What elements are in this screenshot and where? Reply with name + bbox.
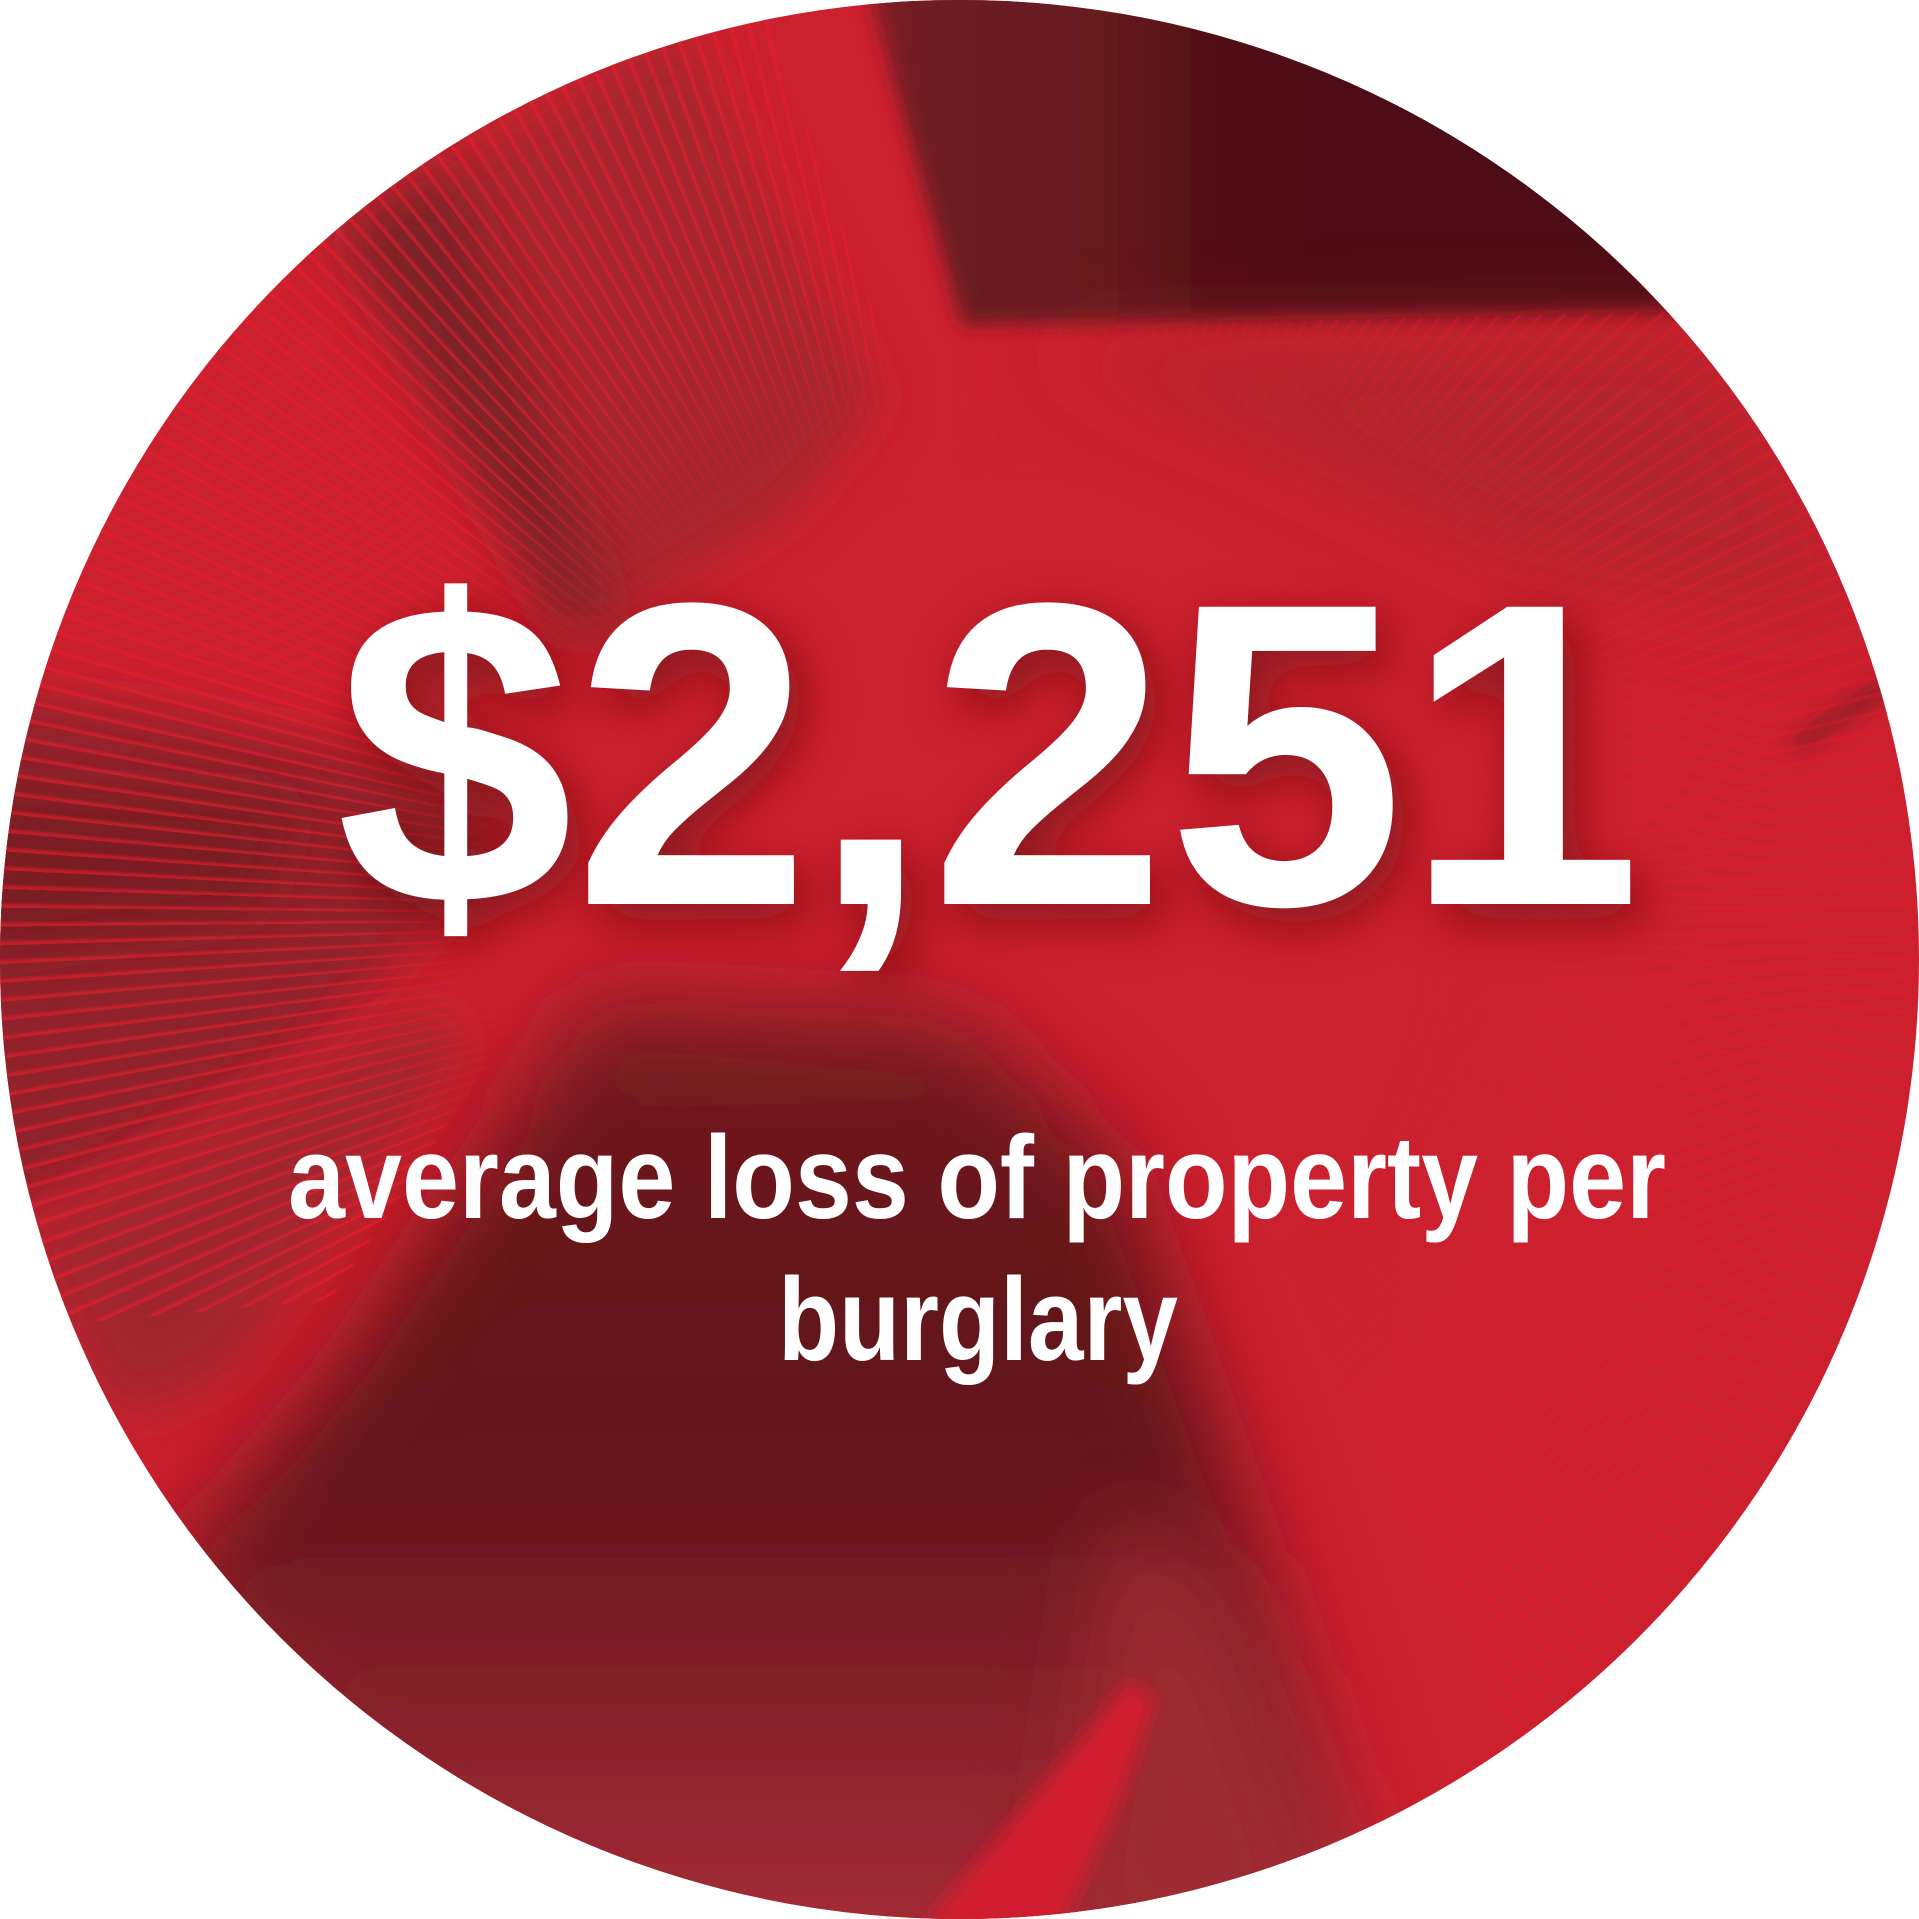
muted band lower left edge [20, 1010, 470, 1420]
muted striped zone top right [1020, 330, 1860, 620]
lighter muted zone bottom right of dark shape [1050, 1500, 1350, 1919]
caption line 2: burglary [778, 1254, 1178, 1386]
bright red streak bottom [920, 1680, 1155, 1919]
dark streak right edge [1790, 680, 1890, 750]
muted striped fan left [0, 690, 520, 1230]
big number: $2,251 [336, 513, 1642, 996]
background: burst lines right [977, 312, 1919, 1738]
muted striped zone upper left [330, 30, 880, 640]
background: burst lines left [0, 20, 890, 1322]
dark blurred shape bottom centre [160, 1000, 1400, 1919]
caption line 1: average loss of property per [288, 1112, 1666, 1244]
caption [288, 1112, 1666, 1386]
dark panel top right [860, 0, 1919, 325]
